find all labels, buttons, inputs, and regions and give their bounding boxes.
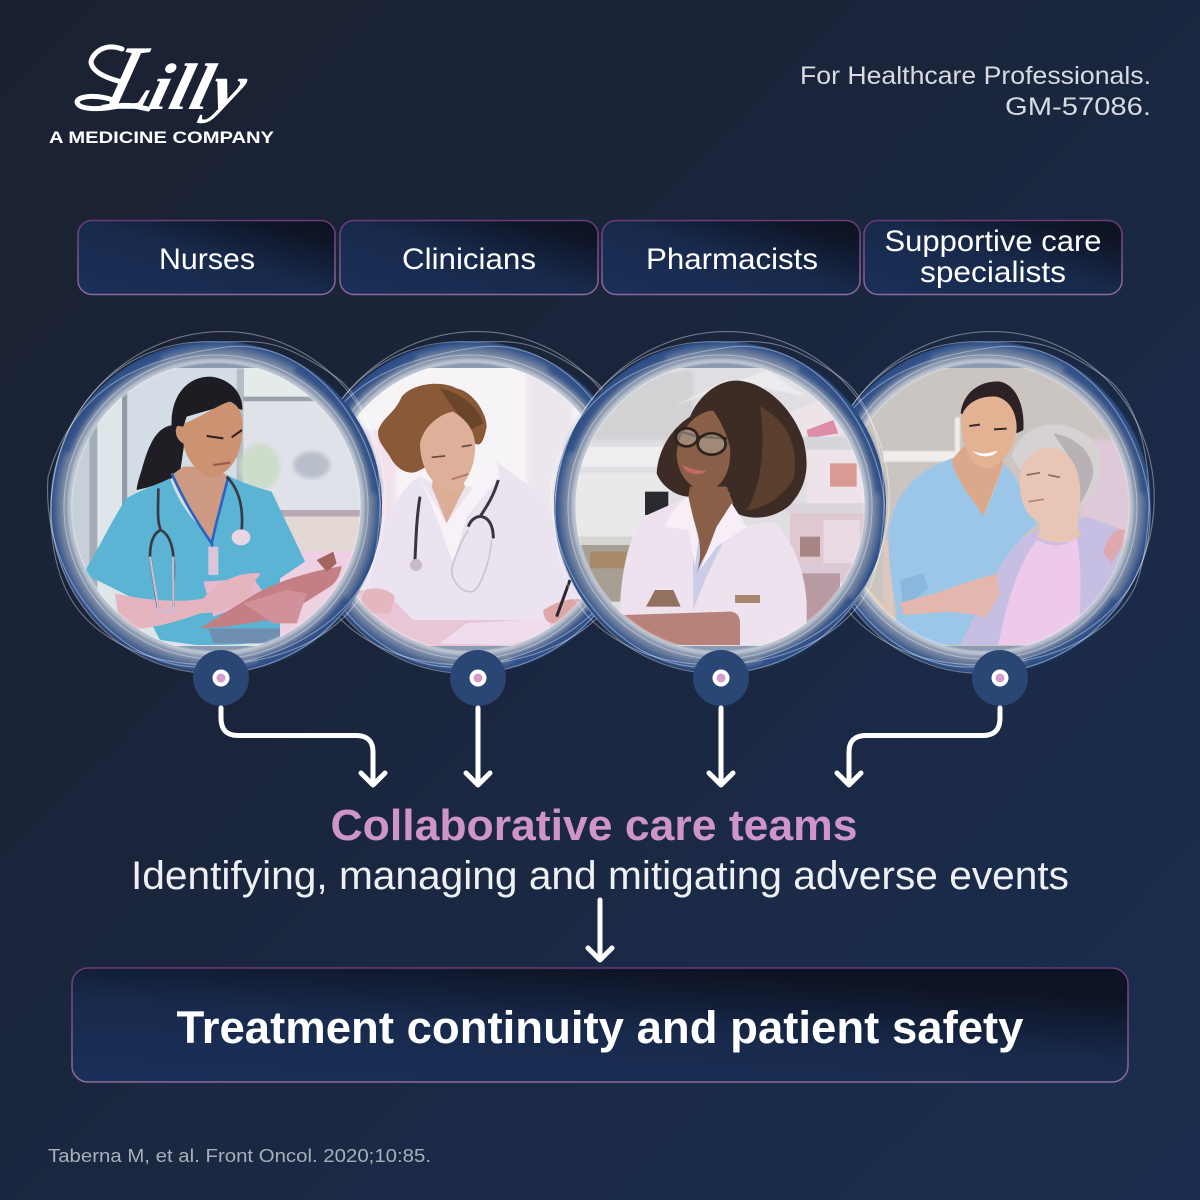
hair	[657, 381, 807, 518]
role box: Supportive care specialists: Supportive care	[884, 225, 1102, 258]
arrow: pharmacists to team	[709, 708, 733, 785]
hair and face	[172, 377, 242, 427]
role box: Supportive care specialists: specialists	[920, 256, 1066, 289]
outcome box	[72, 968, 1128, 1082]
nurse hair and face	[961, 381, 1024, 433]
role box: Nurses: Nurses	[159, 243, 255, 276]
role box: Nurses	[78, 220, 335, 294]
photo circle: clinician	[339, 331, 604, 674]
logo: Lilly: illy	[142, 51, 255, 124]
connector node: pharmacists	[693, 650, 749, 706]
outcome box: Treatment continuity and patient safety	[176, 1002, 1024, 1053]
arm and hands	[900, 573, 1000, 617]
arrow: specialists to team	[837, 708, 1000, 785]
photo circle: nurse	[47, 331, 386, 673]
clipboard and hand	[200, 566, 342, 628]
header note	[800, 62, 1151, 121]
arrow: clinicians to team	[466, 708, 490, 785]
citation: Taberna M, et al. Front Oncol. 2020;10:85.	[48, 1146, 431, 1166]
connector node: clinicians	[450, 650, 506, 706]
role box: Supportive care specialists	[864, 220, 1122, 294]
role box: Clinicians: Clinicians	[402, 243, 536, 276]
logo: Lilly: L	[95, 28, 171, 128]
header note: GM-57086.	[1005, 93, 1151, 121]
logo: Lilly: A MEDICINE COMPANY	[49, 129, 274, 147]
connector node: specialists	[972, 650, 1028, 706]
paper and pen	[440, 618, 550, 645]
arm	[115, 573, 260, 629]
stethoscope	[150, 477, 242, 610]
role box: Pharmacists	[602, 220, 860, 294]
ponytail	[137, 425, 187, 490]
coat	[620, 497, 807, 645]
photo circle: supportive care specialist	[848, 331, 1155, 674]
stethoscope	[415, 480, 498, 560]
clipboard	[623, 612, 740, 645]
heading: collaborative care teams: Collaborative care teams	[330, 801, 858, 850]
arrow: to outcome	[588, 900, 612, 960]
scrubs	[83, 475, 305, 645]
elder	[962, 517, 1123, 645]
photo circle: pharmacist	[551, 331, 890, 672]
role box: Clinicians	[340, 220, 598, 294]
scrubs	[888, 457, 1037, 645]
neck and face	[432, 481, 466, 524]
elder hair and face	[1012, 424, 1102, 507]
subheading: Identifying, managing and mitigating adverse events	[131, 854, 1069, 898]
coat	[362, 462, 582, 620]
connector node: nurses	[193, 650, 249, 706]
hair	[378, 384, 487, 473]
logo: Lilly	[49, 28, 274, 147]
role box: Pharmacists: Pharmacists	[646, 243, 818, 276]
header note: For Healthcare Professionals.	[800, 62, 1151, 90]
face	[677, 411, 730, 492]
arrow: nurses to team	[221, 708, 385, 785]
